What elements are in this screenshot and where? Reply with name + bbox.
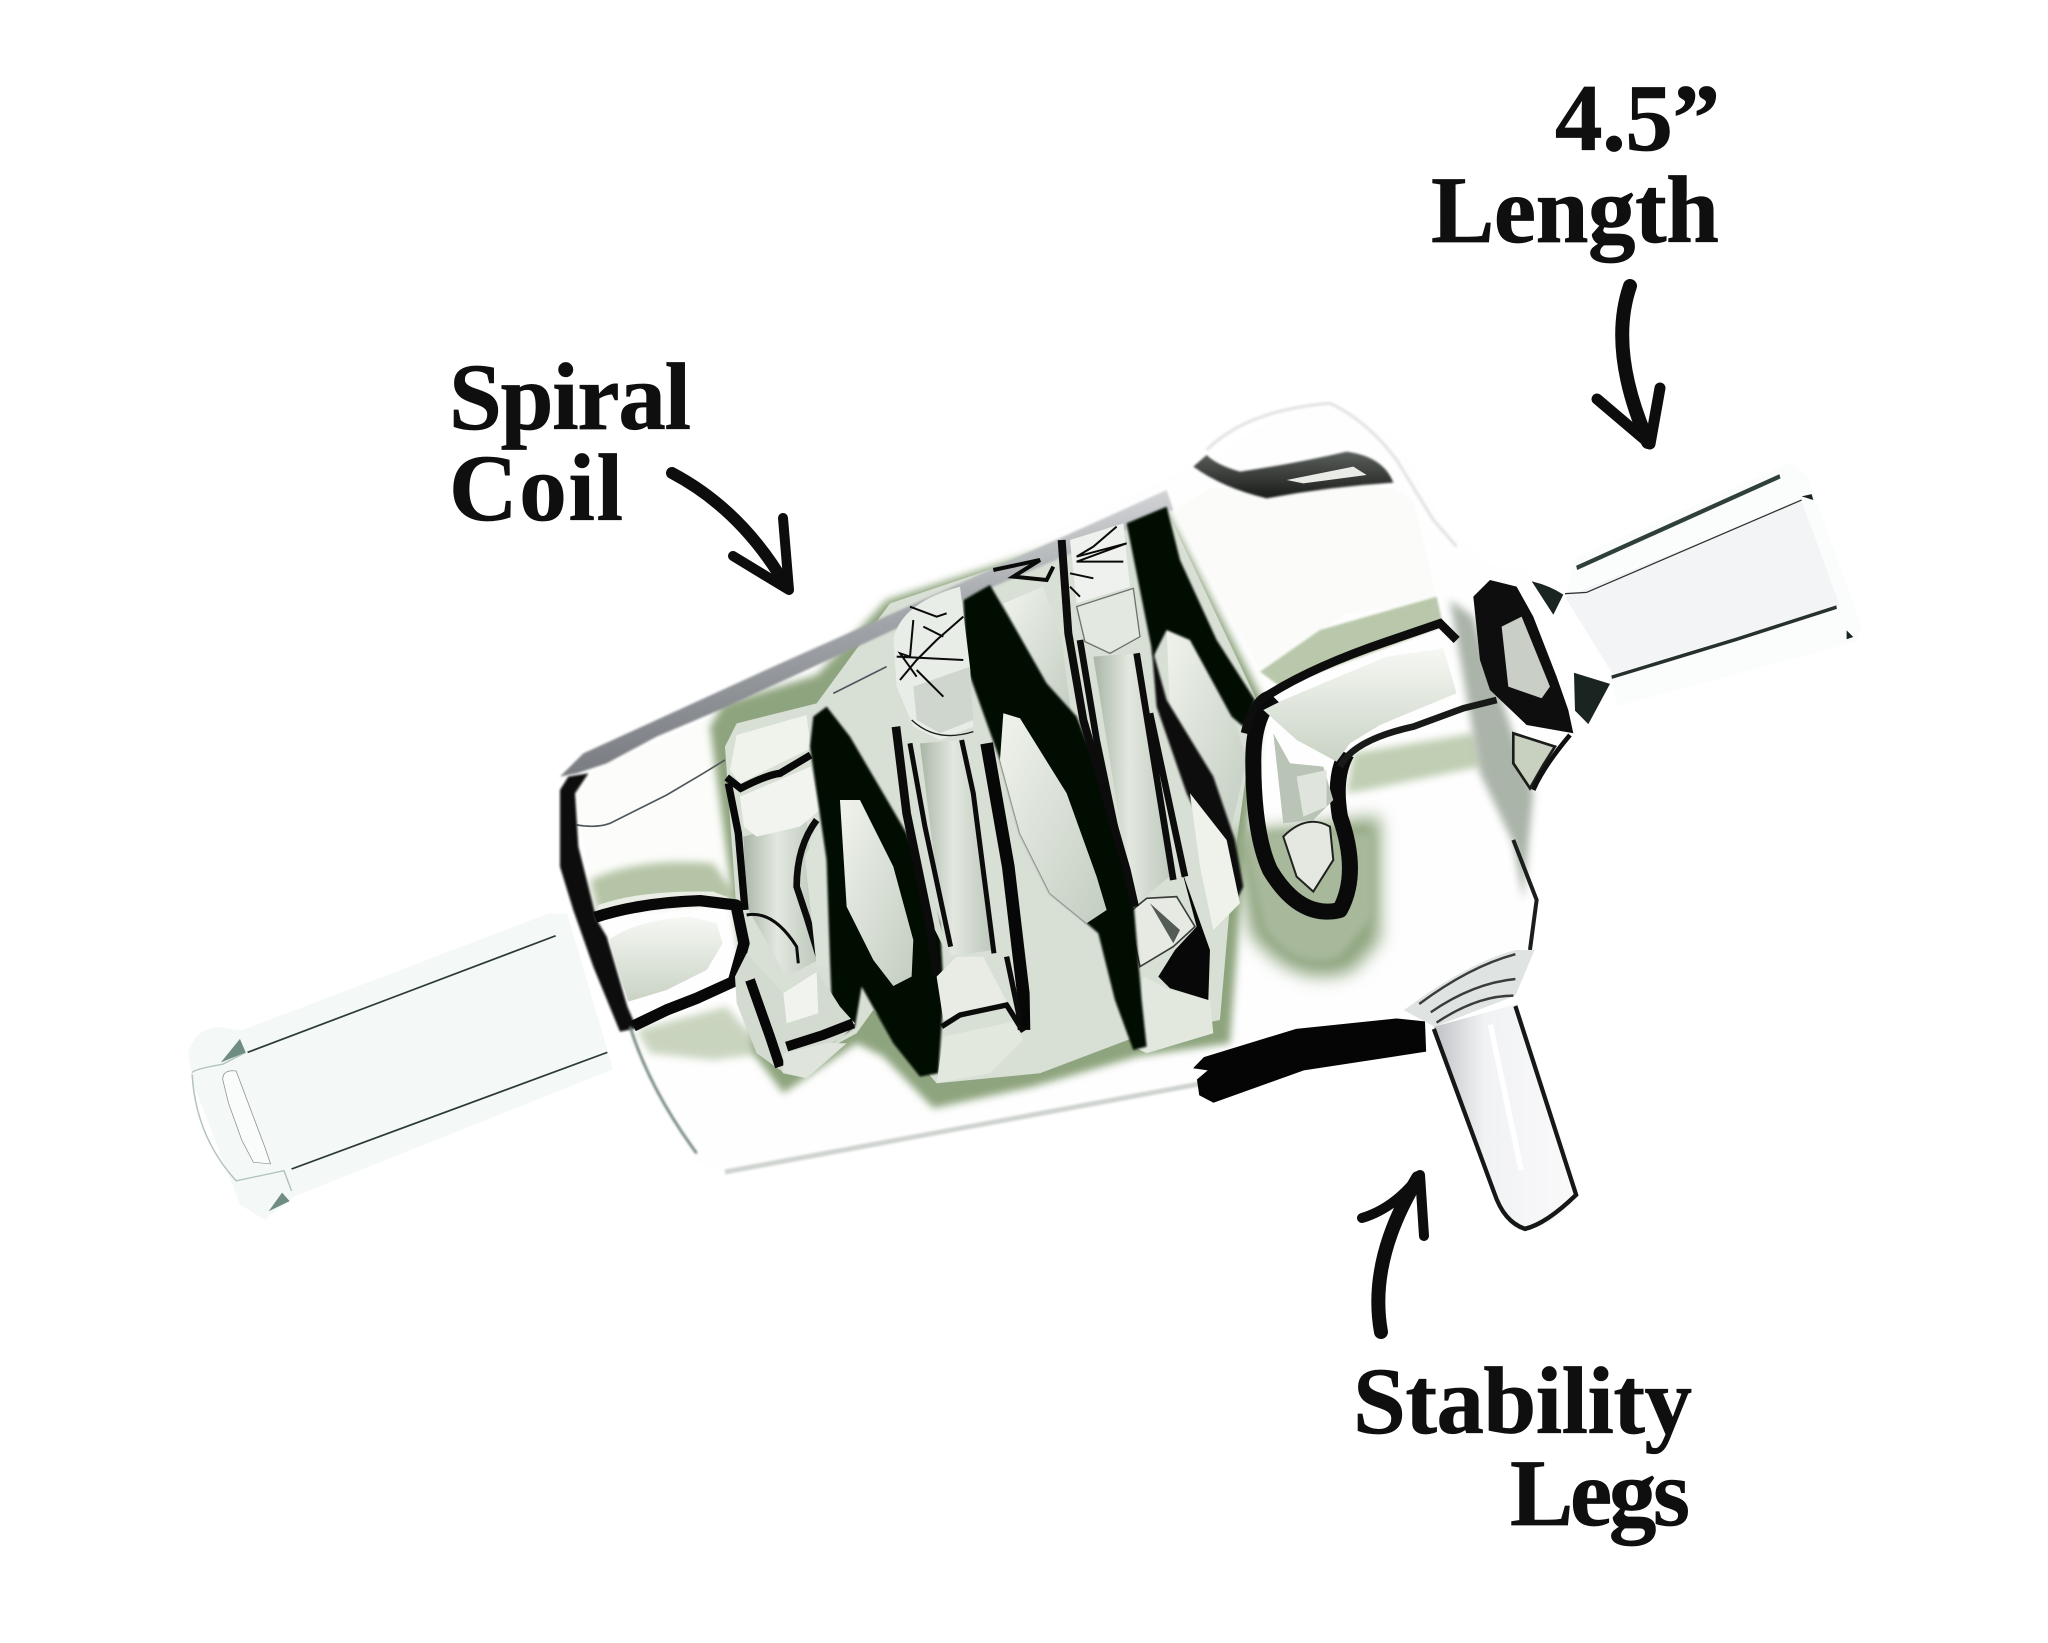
left rim lower [630,1027,697,1153]
left mouthpiece tube [188,914,613,1220]
leg highlight [1490,1025,1521,1170]
col two crack cap [893,587,973,740]
central section of coil [893,473,1380,1053]
label: stability legs [1353,1348,1692,1546]
col two ball rim [912,720,973,736]
stability word: Stability [1353,1348,1692,1454]
top glass band [560,490,1173,777]
diagonal one with left leg [810,707,944,1077]
upper chamber [1180,488,1438,670]
diagonal three lower [1152,647,1243,900]
neck lines [1577,476,1780,568]
lozenge two [1000,713,1107,923]
stability leg [1193,950,1578,1229]
left chamber [575,710,727,880]
coil inner base [725,510,1257,1083]
upper sliver [1003,587,1072,717]
col two cap shade [913,667,973,733]
leg edges [1434,1006,1576,1229]
cracks [897,527,1127,697]
glass crown edge [1207,403,1457,547]
arrow: length [1597,286,1660,444]
leg tube [1434,1004,1578,1229]
length word: Length [1431,157,1719,263]
lobe top band highlight [598,891,730,915]
leg collar [1404,950,1535,1027]
column two foot lines [942,957,1023,1032]
tube lines [1245,623,1457,733]
col three lines [1080,640,1185,883]
top tube [1193,452,1393,498]
loop mid tone [1273,733,1333,823]
lower chamber [1263,648,1457,762]
vertical dark line [1062,540,1135,907]
column two base [937,1022,1023,1083]
lower black wedge [1158,870,1210,1000]
glass piece [188,403,1862,1229]
right loop outer [1253,697,1350,912]
green under chamber [1260,597,1443,687]
junction mass [1473,580,1573,733]
lower pale strip [1190,793,1240,930]
neck dark glints [1532,494,1853,724]
loop inner white [1283,822,1333,892]
bulb strokes [750,980,853,1067]
bubble panel [1502,617,1550,698]
lobe ring [595,901,744,1026]
loop centre light [1297,770,1327,817]
length value: 4.5” [1555,65,1720,171]
green lower body [637,1007,767,1060]
coil base layer [560,490,1263,1108]
column one cap top [730,715,811,783]
column one cap [740,767,820,837]
halo core [1243,833,1373,961]
top tube highlight [1287,467,1367,483]
col three foot [1128,897,1195,967]
col three foot glint [1150,903,1180,943]
column one lines [727,755,811,910]
lozenge one [840,800,913,986]
column one mid [743,820,818,977]
right section details [1193,452,1573,950]
coil halo [710,510,1263,1108]
chamber white [1173,473,1380,667]
coil word: Coil [449,435,623,541]
diagonal two [963,585,1147,1050]
legs word: Legs [1510,1440,1690,1546]
right lower wall [1513,840,1537,950]
col three tube [1093,653,1173,907]
column one inner line [797,820,820,960]
diagonal three upper [1127,507,1255,727]
bulb lower light [783,1043,847,1078]
lower junction window [1513,733,1555,788]
bulb light [783,972,818,1023]
arrow: spiral coil [672,473,789,590]
green band left [590,862,740,910]
upper right chamber base [1180,403,1533,900]
left section of coil [560,707,1024,1153]
body bottom edge [725,1082,1210,1172]
right neck tube [1532,463,1862,724]
col three crack cap [1070,523,1130,603]
lobe interior [608,917,723,1002]
col three base [1133,977,1213,1053]
right outer wall [1533,735,1570,790]
third pale panel [1167,630,1247,833]
col one bottom bulb [735,953,855,1070]
col three ball [1077,588,1140,653]
collar stripes [1419,954,1515,1023]
label: spiral coil [449,344,691,541]
neck inner panel [1565,501,1840,675]
left rim wall [560,773,637,1032]
wavy line [577,667,887,826]
arrow: stability legs [1362,1175,1424,1332]
column two pale strip [910,807,947,953]
column one loop line [747,914,798,963]
label: 4.5 inch length [1431,65,1720,263]
green under tube [1347,733,1480,793]
column two lines [896,727,937,977]
spiral word: Spiral [449,344,691,450]
black bar [1193,1018,1426,1103]
halo right loop [1233,817,1380,976]
column one pale right [805,820,830,967]
neck outer tube fill [1567,463,1862,706]
column two fill [920,740,993,957]
main body outline [564,408,1575,1172]
shoulder band [1450,600,1533,900]
column two foot [937,957,1007,1020]
